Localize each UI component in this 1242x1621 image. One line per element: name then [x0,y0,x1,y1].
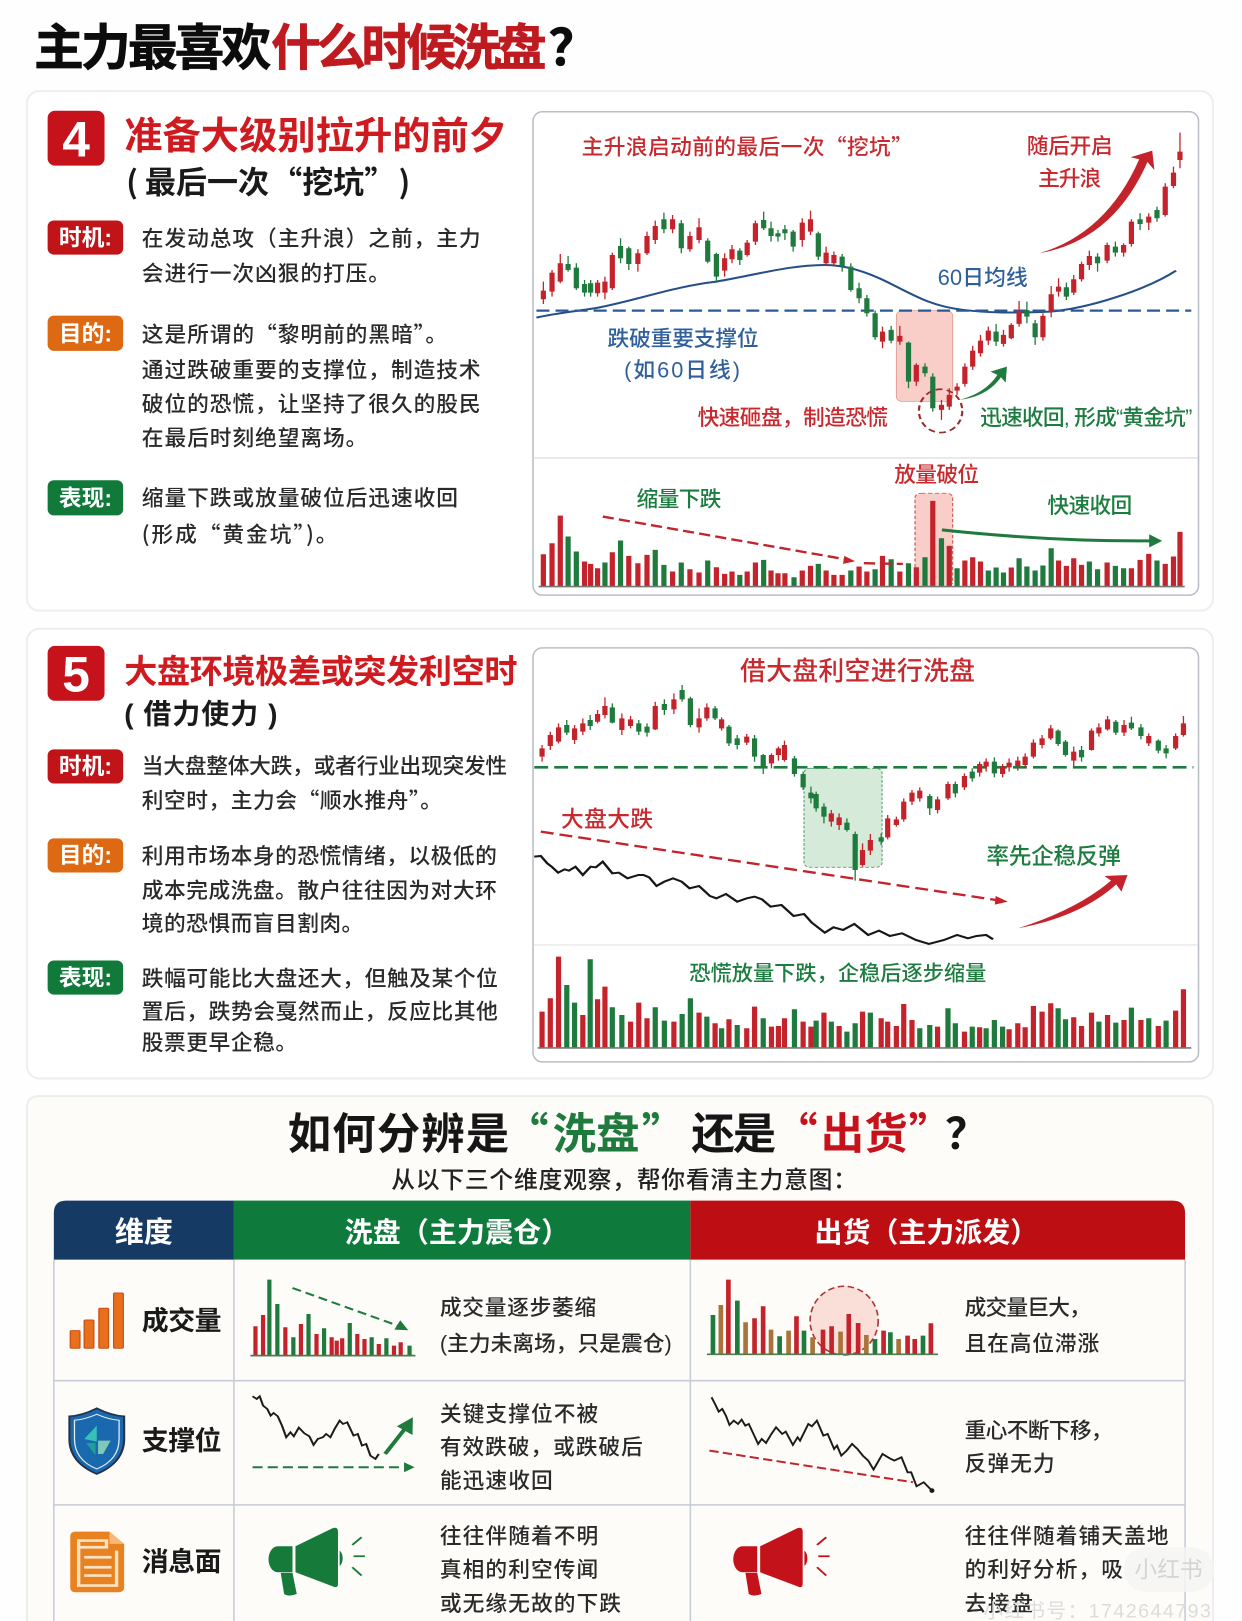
label: support: 支撑位 [142,1425,221,1456]
arrow: rebound [1018,875,1128,928]
text: timing [142,754,507,815]
row: news [70,1524,1169,1616]
tag: behaviour: 表现: [59,485,112,511]
candlestick chart [534,685,1193,944]
panel: card 4 pre-rally washout [27,91,1213,611]
text: washout volume [440,1295,672,1356]
market index line [534,856,993,944]
chart annotations: 大盘大跌 [561,806,653,832]
heading: washout vs distribution: 如何分辨是 [288,1111,509,1159]
text: purpose: 境的恐惧而盲目割肉。 [142,911,363,936]
text: purpose: 成本完成洗盘。散户往往因为对大环 [142,878,497,903]
subheading: card 4: ) [398,158,410,203]
tag: timing [48,749,123,783]
text: distribution support: 重心不断下移， [965,1418,1113,1443]
table header: distribution: 出货（主力派发） [815,1217,1038,1248]
watermark: 小红书 [1134,1556,1203,1582]
chart annotations: 迅速收回, 形成“黄金坑” [980,405,1192,430]
tag: timing: 时机: [59,753,112,779]
text: washout news [440,1524,621,1616]
chart annotations: (如60日线) [624,357,740,382]
badge: number 5 [48,646,105,702]
chart annotations: 快速收回 [1047,493,1132,518]
icon: red megaphone [733,1528,830,1596]
tag: purpose [48,316,123,351]
text: distribution volume [965,1295,1099,1356]
subheading: card 4: ( [126,158,138,203]
text: behaviour: (形成“黄金坑”)。 [142,518,338,549]
chart annotations: 60日均线 [938,265,1028,290]
subheading: card 4: 最后一次 [145,158,269,203]
text: distribution news: 去接盘 [965,1591,1033,1616]
mini chart: shrinking volume [250,1280,415,1356]
text: distribution news: 的利好分析，吸 [965,1557,1123,1582]
title: 什么时候洗盘 [271,20,546,76]
label: news: 消息面 [142,1547,221,1577]
chart annotations: 率先企稳反弹 [986,843,1121,869]
mini chart: support held [253,1396,415,1472]
table header: dimension: 维度 [115,1217,173,1249]
text: washout support: 有效跌破，或跌破后 [440,1435,643,1460]
text: distribution support [965,1418,1113,1476]
chart panel: market crash candlestick and volume [533,648,1199,1062]
table header: washout [234,1201,690,1260]
text: behaviour: 跌幅可能比大盘还大，但触及某个位 [142,966,498,991]
chart annotations: 主升浪 [1038,166,1101,191]
chart annotations: 快速砸盘，制造恐慌 [698,405,888,430]
heading: washout vs distribution: 出货 [821,1111,908,1159]
watermark [983,1547,1214,1621]
heading: washout vs distribution: 洗盘 [553,1111,640,1159]
badge: number 4 [48,111,105,167]
tag: behaviour [48,480,123,515]
icon: green megaphone [269,1528,365,1596]
heading: card 4: 准备大级别拉升的前夕 [124,115,507,158]
text: behaviour [142,966,498,1055]
tag: purpose [48,838,123,872]
subheading: card 5: ( 借力使力 ) [124,698,277,729]
heading: washout vs distribution: 还是 [691,1111,776,1159]
text: distribution support: 反弹无力 [965,1451,1055,1476]
chart annotations: 恐慌放量下跌，企稳后逐步缩量 [689,962,986,986]
chart annotations: 缩量下跌 [637,487,722,512]
heading: washout vs distribution: ” [909,1099,952,1162]
tag: behaviour: 表现: [59,964,112,990]
arrow: main rally [1039,151,1154,253]
tag: behaviour [48,960,123,995]
volume chart [538,957,1191,1048]
text: washout support [440,1402,643,1493]
tag: purpose: 目的: [59,842,112,868]
badge: number 5: 5 [62,646,90,702]
chart annotations: 借大盘利空进行洗盘 [740,657,975,686]
text: washout news: 真相的利空传闻 [440,1557,598,1582]
text: behaviour: 置后，跌势会戛然而止，反应比其他 [142,999,498,1024]
text: washout news: 或无缘无故的下跌 [440,1591,621,1616]
text: purpose: 破位的恐慌，让坚持了很久的股民 [142,391,482,416]
arrow: volume recovery [942,530,1162,548]
title: 主力最喜欢 [34,20,271,76]
badge: number 4: 4 [62,111,90,167]
title: ？ [549,20,598,76]
table header: washout: 洗盘（主力震仓） [345,1217,569,1248]
tag: timing: 时机: [59,224,112,250]
text: distribution volume: 成交量巨大， [965,1295,1091,1320]
text: purpose: 利用市场本身的恐慌情绪，以极低的 [142,844,497,869]
label: volume: 成交量 [142,1306,221,1336]
text: behaviour: 股票更早企稳。 [142,1030,297,1055]
arrow: shrinking volume [603,517,903,564]
arrow: quick recovery [959,367,1007,400]
subheading: card 4: ” [364,158,395,203]
text: washout volume: 成交量逐步萎缩 [440,1295,596,1320]
volume chart [539,493,1185,587]
text: purpose [142,318,482,451]
heading: card 5: 大盘环境极差或突发利空时 [124,654,518,691]
text: timing: 在发动总攻（主升浪）之前，主力 [142,226,482,251]
text: timing: 当大盘整体大跌，或者行业出现突发性 [142,754,507,779]
text: timing: 利空时，主力会“顺水推舟”。 [142,784,442,815]
arrow: market slump trend [541,832,1008,905]
icon: bar signal [70,1293,123,1348]
text: distribution volume: 且在高位滞涨 [965,1331,1099,1356]
chart annotations [561,657,1121,986]
row: volume [70,1280,1099,1356]
subheading: three dimensions: 从以下三个维度观察，帮你看清主力意图： [391,1167,857,1194]
heading: washout vs distribution: “ [505,1099,549,1162]
chart annotations: 随后开启 [1027,134,1113,159]
tag: timing [48,220,123,255]
text: washout support: 能迅速收回 [440,1468,553,1493]
subheading: card 4: 挖坑 [302,158,364,203]
title [34,20,598,76]
panel: how to distinguish washout from distribution [27,1096,1214,1621]
text: distribution news: 往往伴随着铺天盖地 [965,1524,1169,1549]
table header: distribution [690,1201,1185,1260]
text: washout volume: (主力未离场，只是震仓) [440,1331,672,1356]
text: purpose: 这是所谓的“黎明前的黑暗”。 [142,318,448,349]
chart annotations [582,131,1192,518]
heading: washout vs distribution: ？ [945,1111,988,1159]
text: purpose: 通过跌破重要的支撑位，制造技术 [142,357,482,382]
text: washout support: 关键支撑位不被 [440,1402,599,1427]
text: purpose [142,844,497,936]
candlestick chart [536,133,1191,433]
icon: shield [69,1408,124,1474]
heading: washout vs distribution: “ [774,1099,818,1162]
chart annotations: 主升浪启动前的最后一次“挖坑” [582,131,913,162]
subheading: card 4: “ [271,158,302,203]
comparison table [54,1201,1185,1621]
panel: card 5 market crash washout [27,629,1213,1078]
text: behaviour: 缩量下跌或放量破位后迅速收回 [142,486,459,511]
mini chart: high volume stalling [707,1280,938,1355]
tag: purpose: 目的: [59,321,112,347]
text: behaviour [142,486,459,549]
row: support level [69,1396,1113,1493]
chart annotations: 跌破重要支撑位 [608,326,759,351]
text: timing: 会进行一次凶狠的打压。 [142,261,391,286]
chart panel: golden pit candlestick and volume [533,112,1199,595]
heading: washout vs distribution: ” [642,1099,685,1162]
icon: document [70,1532,124,1592]
table header: dimension [54,1201,234,1260]
text: distribution news [965,1524,1169,1616]
text: timing [142,226,482,286]
text: purpose: 在最后时刻绝望离场。 [142,426,368,451]
text: washout news: 往往伴随着不明 [440,1524,598,1549]
mini chart: falling support [709,1397,934,1493]
heading: washout vs distribution [288,1099,988,1162]
chart annotations: 放量破位 [894,462,979,487]
